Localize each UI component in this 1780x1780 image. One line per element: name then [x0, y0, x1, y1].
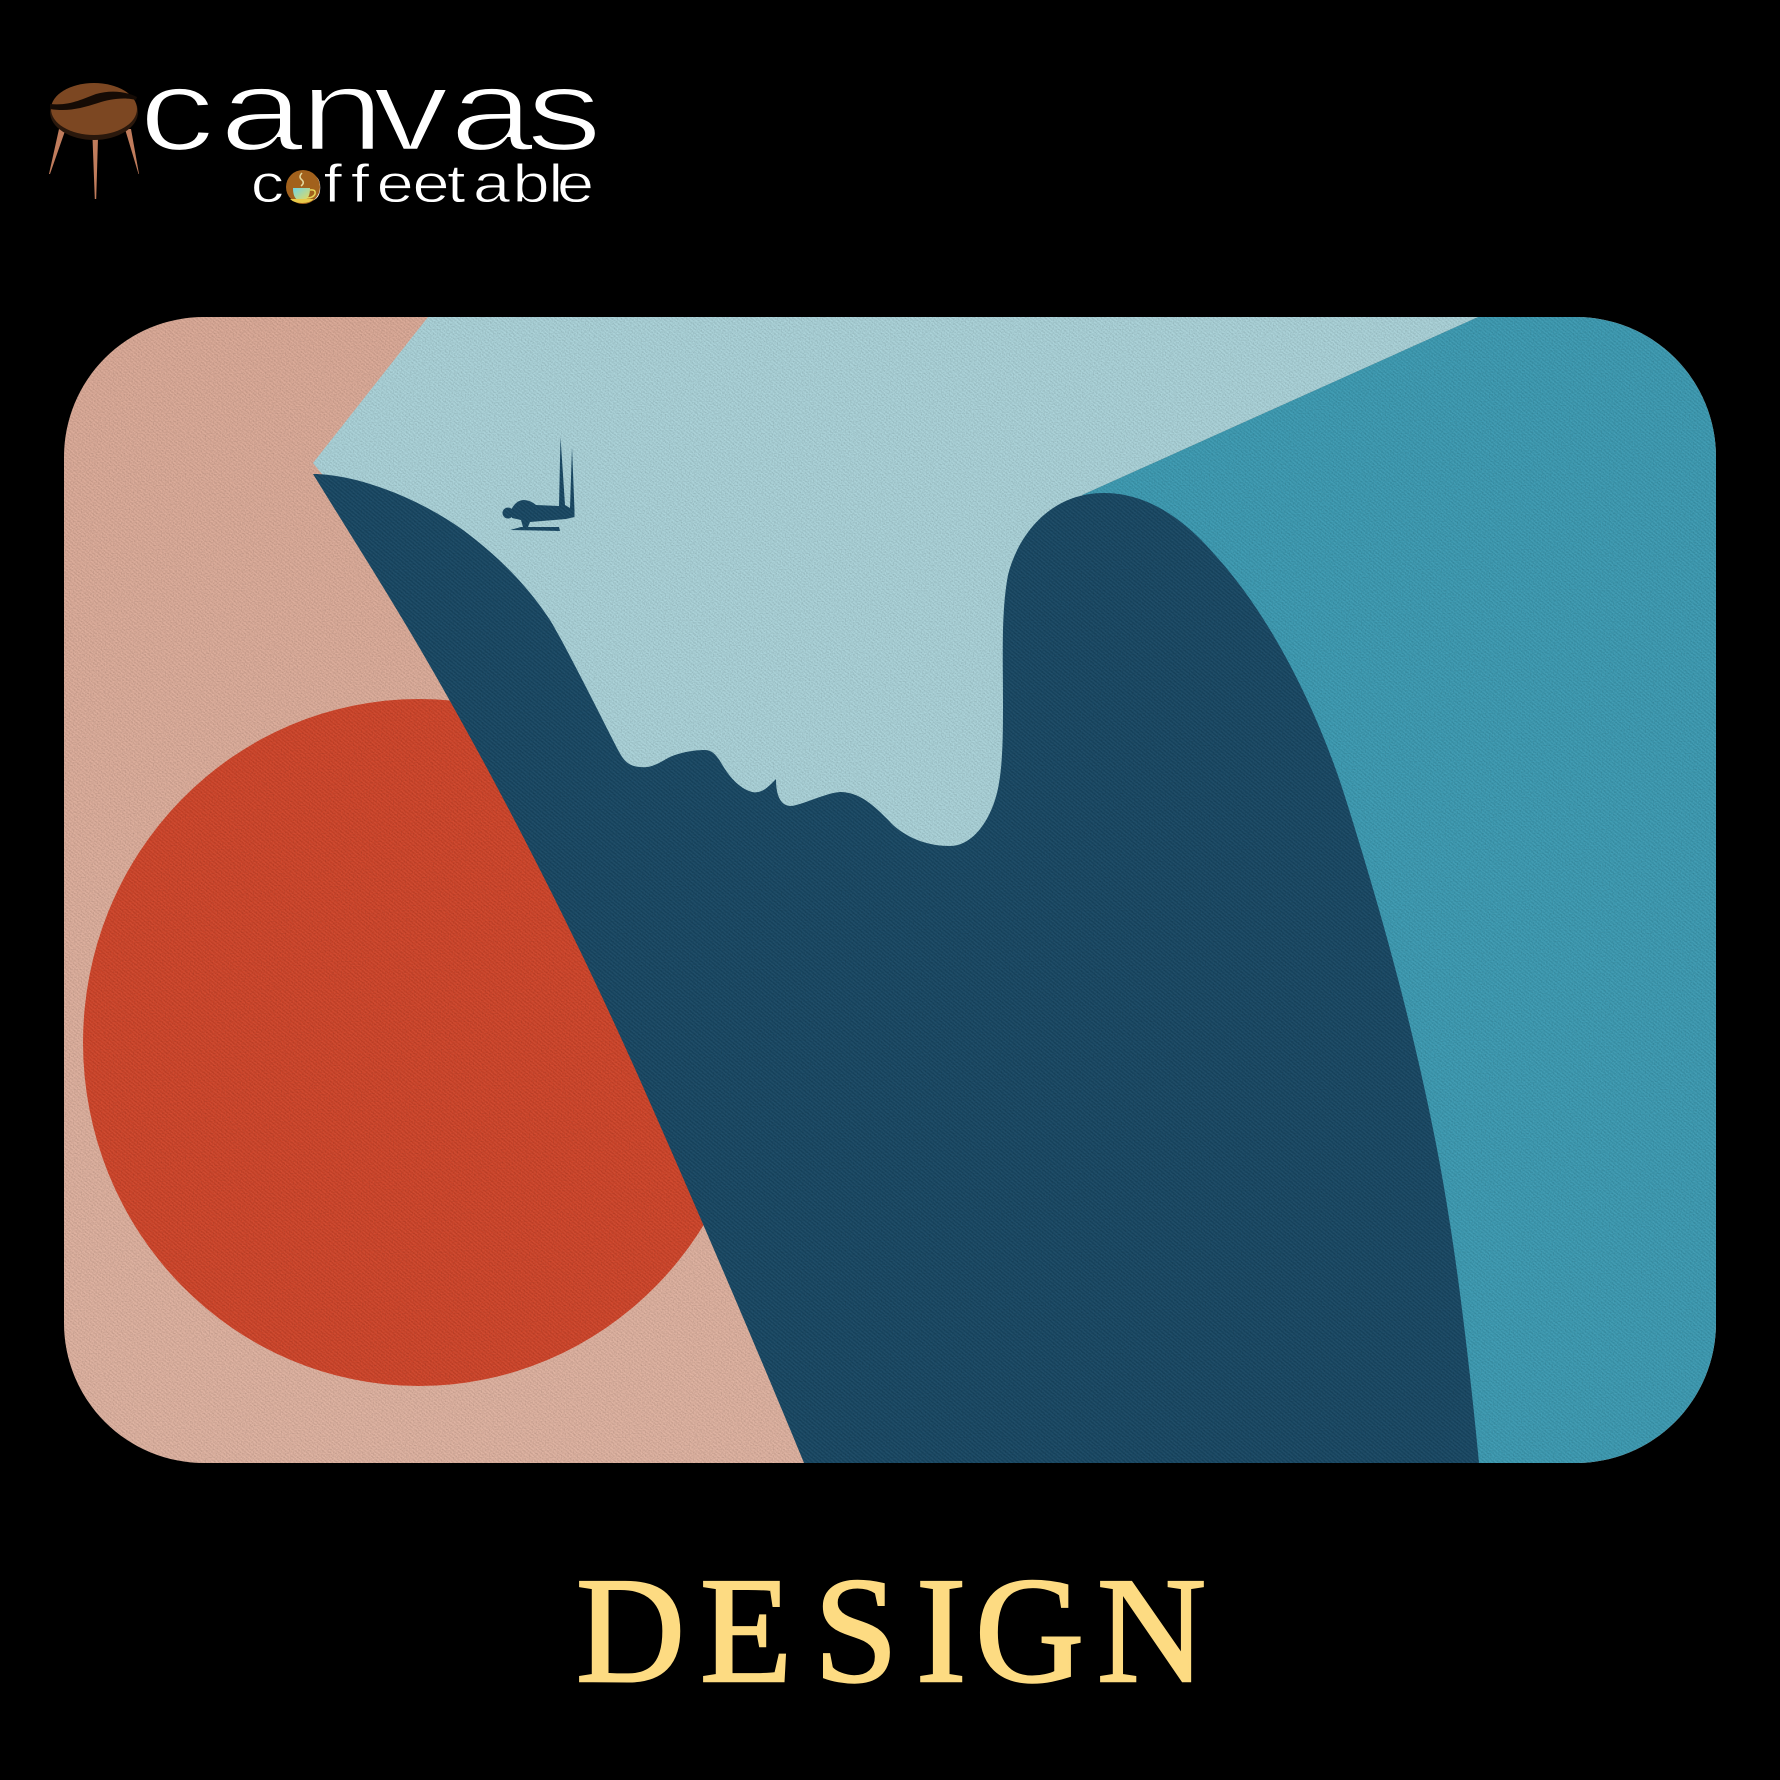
- wordmark: canvas: canvas: [139, 45, 602, 175]
- red sun circle: [83, 699, 755, 1386]
- panel: artwork: [64, 317, 1716, 1463]
- fabric twill texture: [64, 317, 1479, 1463]
- teal panel: [1082, 317, 1716, 1463]
- tiny figure doing a handstand: [502, 437, 574, 531]
- title: DESIGN: [576, 1546, 1206, 1714]
- fabric grain texture: [64, 317, 1716, 1463]
- wordmark: coffeetable: coffeetable: [251, 153, 594, 214]
- navy face silhouette: [313, 474, 1479, 1463]
- icon: coffee cup: [286, 170, 320, 204]
- icon: coffee bean table: [49, 83, 139, 199]
- logo: [49, 45, 602, 214]
- background: peach: [64, 317, 1716, 1463]
- light blue sky: [313, 317, 1478, 900]
